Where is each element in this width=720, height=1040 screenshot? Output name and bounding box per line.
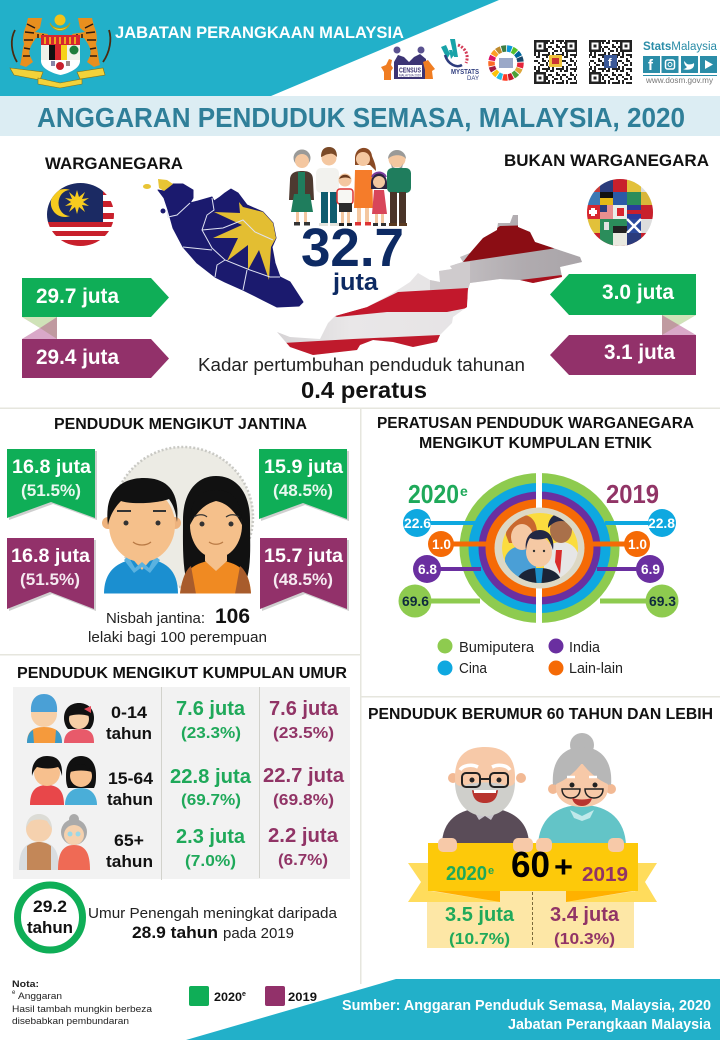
label: 65+: tahun [106, 852, 153, 871]
bubbles: 2019 values: 6.9 [641, 562, 660, 577]
banner: 60+: 2019 [582, 864, 628, 886]
values: 65+: 2.2 juta [268, 825, 339, 847]
elderly man [442, 747, 529, 845]
map: east malaysia [277, 215, 582, 355]
sex ratio [88, 605, 267, 646]
icon: census logo: CENSUS [399, 66, 421, 74]
icon: mystats day logo: DAY [467, 75, 480, 82]
footer banner: Jabatan Perangkaan Malaysia [508, 1017, 712, 1033]
statsmalaysia social block: www.dosm.gov.my [645, 76, 713, 85]
tag: warganegara 2019 [22, 339, 169, 378]
banner: 60+: e [488, 865, 494, 877]
heading: etnik: PERATUSAN PENDUDUK WARGANEGARA [377, 415, 694, 432]
elderly woman [538, 733, 626, 845]
map: peninsular malaysia [143, 179, 303, 307]
median age text: 28.9 tahun [132, 923, 218, 942]
legend: years: 2019 [288, 992, 317, 1004]
values: 65+: 2.3 juta [176, 826, 246, 848]
banner: 60+: + [554, 851, 573, 884]
median age text [88, 905, 338, 942]
label: 15-64: 15-64 [108, 770, 154, 788]
tag: bukan warganegara 2020 [550, 274, 696, 315]
ribbon: male 2020: 16.8 juta [12, 457, 91, 478]
values: 60+ 2019 [550, 904, 620, 948]
label: 0-14: tahun [106, 724, 152, 743]
icon: children [27, 694, 94, 743]
label: 2020e: e [460, 483, 468, 499]
panel: pale value box [427, 890, 634, 948]
tag: warganegara 2019: 29.4 juta [36, 346, 119, 369]
values: 0-14: 7.6 juta [176, 698, 246, 720]
median age ring: 29.2 [33, 897, 67, 916]
grandmother [289, 150, 314, 226]
tag: bukan warganegara 2019: 3.1 juta [604, 341, 675, 364]
man [102, 478, 181, 594]
tiger left [12, 18, 48, 67]
people in circle [502, 513, 578, 583]
heading: warganegara: WARGANEGARA [45, 154, 183, 173]
icon: qr code facebook: f [608, 57, 612, 69]
tag connector right [662, 315, 696, 335]
header banner [0, 0, 499, 96]
growth rate [198, 355, 525, 403]
bubbles: 2019 values: 22.8 [648, 516, 675, 531]
notes: disebabkan pembundaran [12, 1016, 129, 1027]
ribbon: male 2019 [7, 538, 96, 611]
heading: jantina: PENDUDUK MENGIKUT JANTINA [54, 416, 307, 433]
tag: warganegara 2020: 29.7 juta [36, 285, 119, 308]
values: 65+: (6.7%) [278, 852, 328, 869]
title band: ANGGARAN PENDUDUK SEMASA, MALAYSIA, 2020 [37, 102, 685, 133]
icon: census logo [381, 46, 435, 80]
values: 60+ 2019: 3.4 juta [550, 904, 620, 926]
values: 60+ 2020: (10.7%) [449, 931, 510, 948]
banner: 60+ [408, 838, 657, 902]
icon: qr code website [534, 40, 577, 84]
ribbon: female 2020: (48.5%) [273, 481, 333, 500]
banner: 60+: 60 [511, 844, 550, 885]
header title: JABATAN PERANGKAAN MALAYSIA [115, 24, 404, 42]
icon: malaysia flag [47, 183, 114, 246]
tag: warganegara 2020 [22, 278, 169, 317]
tag connector left [22, 317, 57, 339]
bubbles: 2019 values: 1.0 [628, 537, 647, 552]
grandfather [387, 150, 411, 226]
ribbon: male 2019: 16.8 juta [11, 546, 90, 567]
connector lines [415, 521, 662, 604]
legend: ethnic groups: India [569, 639, 601, 656]
footer banner: Sumber: Anggaran Penduduk Semasa, Malaysia, 2020 [342, 998, 711, 1014]
legend: years: 2020 [214, 992, 242, 1004]
legend: ethnic groups: Cina [459, 660, 488, 677]
panel: age table [13, 687, 350, 880]
statsmalaysia social block: f [648, 57, 654, 74]
notes: Nota: [12, 979, 39, 990]
tag: bukan warganegara 2019 [550, 335, 696, 375]
legend: years [189, 986, 317, 1006]
notes: Hasil tambah mungkin berbeza [12, 1004, 153, 1015]
statsmalaysia social block [643, 41, 718, 85]
heading: bukan warganegara: BUKAN WARGANEGARA [504, 151, 709, 170]
boy [337, 174, 353, 226]
icon: mystats day logo: MYSTATS [451, 67, 479, 76]
values: 0-14: (23.3%) [181, 725, 241, 742]
notes [12, 979, 153, 1027]
heading: etnik [377, 415, 694, 452]
growth rate: Kadar pertumbuhan penduduk tahunan [198, 355, 525, 375]
total population: juta [332, 269, 379, 296]
ribbon: female 2020 [259, 449, 349, 521]
bubbles: 2020 values: 69.6 [402, 594, 429, 609]
icon: census logo: MALAYSIA 2020 [399, 74, 421, 78]
bubbles: 2020 values: 1.0 [432, 537, 451, 552]
mother [354, 148, 376, 226]
chart: ethnic rings [430, 473, 648, 623]
values: 0-14 [176, 698, 339, 742]
values: 60+ 2020: 3.5 juta [445, 904, 515, 926]
tag: bukan warganegara 2020: 3.0 juta [602, 281, 674, 304]
notes: Anggaran [18, 991, 62, 1002]
bubbles: 2019 values: 69.3 [649, 594, 676, 609]
banner: 60+: 2020 [446, 863, 487, 885]
label: 2019: 2019 [606, 479, 659, 509]
illustration: man and woman [102, 447, 253, 594]
total population: 32.7 [301, 218, 404, 278]
label: 0-14: 0-14 [111, 704, 148, 722]
median age ring: tahun [27, 918, 73, 937]
icon: qr code facebook [589, 40, 632, 84]
icon: family [289, 147, 411, 226]
icon: sdg wheel [492, 48, 520, 78]
values: 15-64: 22.8 juta [170, 766, 252, 788]
icon: flags globe [586, 179, 654, 247]
values: 60+ 2019: (10.3%) [554, 931, 615, 948]
values: 15-64 [170, 765, 345, 809]
values: 15-64: 22.7 juta [263, 765, 345, 787]
ribbon: female 2020: 15.9 juta [264, 457, 343, 478]
bubbles: 2020 values: 6.8 [418, 562, 437, 577]
bubbles: 2020 values: 22.6 [404, 516, 431, 531]
legend: ethnic groups [438, 638, 623, 677]
values: 0-14: 7.6 juta [269, 698, 339, 720]
sex ratio: lelaki bagi 100 perempuan [88, 630, 267, 646]
median age text: pada 2019 [223, 925, 294, 942]
illustration: elderly couple [442, 733, 626, 845]
label: 15-64: tahun [107, 790, 153, 809]
tiger right [72, 18, 110, 67]
ribbon: female 2019: (48.5%) [273, 570, 333, 589]
values: 15-64: (69.7%) [181, 792, 241, 809]
values: 65+: (7.0%) [185, 853, 236, 870]
legend: ethnic groups: Lain-lain [569, 660, 623, 677]
statsmalaysia social block: StatsMalaysia [643, 41, 718, 53]
ribbon: male 2020 [7, 449, 97, 520]
icon: coat of arms [10, 14, 110, 88]
ribbon: male 2020: (51.5%) [21, 481, 81, 500]
label: 15-64 [107, 770, 154, 809]
bubbles: 2019 values [624, 509, 678, 618]
girl [371, 173, 387, 226]
woman [180, 476, 251, 594]
values: 60+ 2020 [445, 904, 515, 948]
values: 15-64: (69.8%) [273, 792, 334, 809]
label: 65+: 65+ [114, 832, 144, 850]
icon: adults [30, 756, 97, 805]
median age ring [18, 885, 82, 950]
ribbon: male 2019: (51.5%) [20, 570, 80, 589]
heading: etnik: MENGIKUT KUMPULAN ETNIK [419, 435, 653, 452]
bubbles: 2020 values [398, 509, 454, 618]
sex ratio: 106 [215, 605, 250, 628]
ribbon: female 2019: 15.7 juta [264, 546, 343, 567]
legend: years: e [242, 991, 246, 998]
heading: warga emas: PENDUDUK BERUMUR 60 TAHUN DAN LEBIH [368, 706, 713, 723]
father [316, 147, 339, 226]
label: 0-14 [106, 704, 152, 743]
notes: e [12, 990, 16, 996]
values: 65+ [176, 825, 339, 870]
ribbon: female 2019 [260, 538, 349, 611]
footer banner [186, 979, 720, 1040]
heading: umur: PENDUDUK MENGIKUT KUMPULAN UMUR [17, 665, 347, 682]
label: 2020e: 2020 [408, 479, 459, 509]
sex ratio: Nisbah jantina: [106, 610, 205, 627]
icon: mystats day logo [441, 39, 480, 82]
values: 0-14: (23.5%) [273, 725, 334, 742]
growth rate: 0.4 peratus [301, 377, 427, 403]
median age text: Umur Penengah meningkat daripada [88, 905, 338, 922]
label: 65+ [106, 832, 153, 871]
legend: ethnic groups: Bumiputera [459, 639, 535, 656]
icon: seniors [19, 814, 90, 870]
